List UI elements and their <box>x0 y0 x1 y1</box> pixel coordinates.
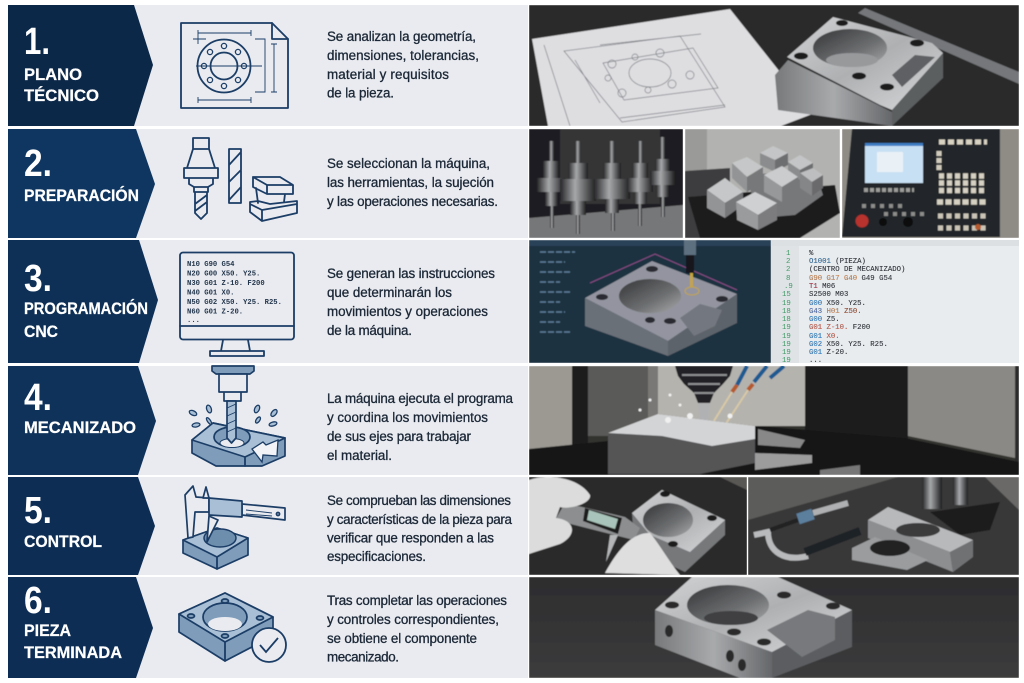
photo: G-code listing: 15 <box>782 291 791 299</box>
photo: finished part <box>529 577 1019 678</box>
text: paso 2: las herramientas, la sujeción <box>327 175 494 190</box>
text: paso 2 <box>327 156 498 209</box>
text: paso 1: Se analizan la geometría, <box>327 29 476 44</box>
text: paso 3: movimientos y operaciones <box>327 304 488 319</box>
text: paso 3: de la máquina. <box>327 323 412 338</box>
chevron 1 <box>8 5 153 126</box>
photo: G-code listing: G90 G17 G40 G49 G54 <box>809 275 893 283</box>
icon: monitor with code: N20 G00 X50. Y25. <box>187 270 260 278</box>
text: paso 5 <box>327 493 513 564</box>
text: paso 6: se obtiene el componente <box>327 631 477 646</box>
icon: check badge <box>252 628 286 662</box>
photo: G-code listing <box>771 240 1019 365</box>
photo: G-code listing: 1 <box>786 250 791 258</box>
icon: technical drawing <box>181 23 288 108</box>
photo: G-code listing: 19 <box>782 300 791 308</box>
row 2: preparación <box>8 129 528 238</box>
photo: G-code listing: 2 <box>786 258 790 266</box>
photo: G-code listing: 2 <box>786 266 790 274</box>
text: paso 1: material y requisitos <box>327 67 449 82</box>
icon: monitor with code: N60 G01 Z-20. <box>187 308 243 316</box>
chevron 5 <box>8 477 155 575</box>
icon: finished part with check <box>179 593 286 662</box>
photo: G-code listing: G00 X50. Y25. <box>809 300 866 308</box>
chevron 5: CONTROL <box>24 533 102 551</box>
icon: monitor with code: N10 G90 G54 <box>187 261 235 269</box>
photo: G-code listing: 19 <box>782 324 791 332</box>
text: paso 5: y características de la pieza para <box>327 512 513 527</box>
photo: blueprint and machined part <box>529 5 1019 126</box>
icon: monitor with code: N50 G02 X50. Y25. R25. <box>187 299 282 307</box>
text: paso 6 <box>327 593 507 664</box>
chevron 6: 6. <box>24 580 52 622</box>
photo: G-code listing: 19 <box>782 349 791 357</box>
photo: caliper inspection <box>529 477 747 575</box>
photo: G-code listing: .9 <box>784 283 793 291</box>
photo: G-code listing: O1001 (PIEZA) <box>809 258 866 266</box>
photo: G-code listing: 18 <box>782 308 791 316</box>
chevron 2: PREPARACIÓN <box>24 186 139 205</box>
chevron 4: 4. <box>24 377 52 419</box>
photo: G-code listing: 19 <box>782 333 791 341</box>
photo: G-code listing: 8 <box>786 275 790 283</box>
icon: monitor with code: ... <box>187 317 200 325</box>
photo: vise setup <box>685 129 840 238</box>
photo: G-code listing: ... <box>809 357 822 365</box>
photo: G-code listing: S2500 M03 <box>809 291 848 299</box>
row 5: control <box>8 477 528 575</box>
text: paso 3: Se generan las instrucciones <box>327 266 495 281</box>
chevron 5: 5. <box>24 490 52 532</box>
text: paso 4 <box>327 391 514 463</box>
icon: machining spindle and part <box>188 366 285 466</box>
photo: CNC control panel <box>842 129 1019 238</box>
text: paso 1: dimensiones, tolerancias, <box>327 48 479 63</box>
row 4: mecanizado <box>8 366 528 475</box>
icon: monitor with code: N30 G01 Z-10. F200 <box>187 280 265 288</box>
text: paso 3 <box>327 266 495 338</box>
chevron 1: PLANO <box>24 66 82 84</box>
photo: G-code listing: G01 Z-20. <box>809 349 848 357</box>
chevron 3: CNC <box>24 323 58 341</box>
text: paso 5: Se comprueban las dimensiones <box>327 493 511 508</box>
chevron 4: MECANIZADO <box>24 419 136 437</box>
text: paso 2: Se seleccionan la máquina, <box>327 156 490 171</box>
icon: caliper measuring part <box>183 486 285 569</box>
photo: G-code listing: G01 X0. <box>809 333 840 341</box>
row 6: pieza terminada <box>8 577 528 678</box>
chevron 3: 3. <box>24 258 52 300</box>
text: paso 4: y coordina los movimientos <box>327 410 488 425</box>
photo: G-code listing: 19 <box>782 341 791 349</box>
photo: G-code listing: 19 <box>782 357 791 365</box>
photo: G-code listing: % <box>809 250 814 258</box>
text: paso 4: de sus ejes para trabajar <box>327 429 472 444</box>
chevron 3: PROGRAMACIÓN <box>24 299 148 318</box>
text: paso 6: y controles correspondientes, <box>327 612 499 627</box>
text: paso 6: Tras completar las operaciones <box>327 593 507 608</box>
chevron 1: TÉCNICO <box>24 86 99 105</box>
photo: machining with coolant <box>529 366 1019 475</box>
row 1: plano técnico <box>8 5 528 126</box>
chevron 6 <box>8 577 153 678</box>
text: paso 2: y las operaciones necesarias. <box>327 194 498 209</box>
icon: monitor with code: N40 G01 X0. <box>187 290 234 298</box>
photo: micrometer and parts <box>748 477 1019 575</box>
photo: G-code listing: G00 Z5. <box>809 316 840 324</box>
photo: G-code listing: G43 H01 Z50. <box>809 308 862 316</box>
photo: CAD toolpath view <box>529 240 771 363</box>
chevron 6: TERMINADA <box>24 644 122 662</box>
text: paso 6: mecanizado. <box>327 650 399 664</box>
photo: G-code listing: G01 Z-10. F200 <box>809 324 870 332</box>
chevron 2: 2. <box>24 143 52 185</box>
photo: G-code listing: (CENTRO DE MECANIZADO) <box>809 266 905 274</box>
photo: G-code listing: T1 M06 <box>809 283 835 291</box>
text: paso 5: especificaciones. <box>327 549 426 564</box>
chevron 6: PIEZA <box>24 622 71 640</box>
photo: G-code listing: G02 X50. Y25. R25. <box>809 341 888 349</box>
chevron 1: 1. <box>24 21 50 63</box>
photo: G-code listing: 18 <box>782 316 791 324</box>
text: paso 4: el material. <box>327 448 392 463</box>
text: paso 1 <box>327 29 479 100</box>
icon: tool holder, drill and vise <box>184 138 297 221</box>
text: paso 5: verificar que responden a las <box>327 530 494 546</box>
text: paso 4: La máquina ejecuta el programa <box>327 391 514 406</box>
text: paso 1: de la pieza. <box>327 86 394 100</box>
chevron 3 <box>8 240 158 363</box>
chevron 2 <box>8 129 155 238</box>
row 3: programación CNC <box>8 240 528 363</box>
chevron 4 <box>8 366 156 475</box>
text: paso 3: que determinarán los <box>327 285 452 300</box>
photo: tool holders <box>529 129 683 238</box>
icon: monitor with code <box>180 252 294 356</box>
